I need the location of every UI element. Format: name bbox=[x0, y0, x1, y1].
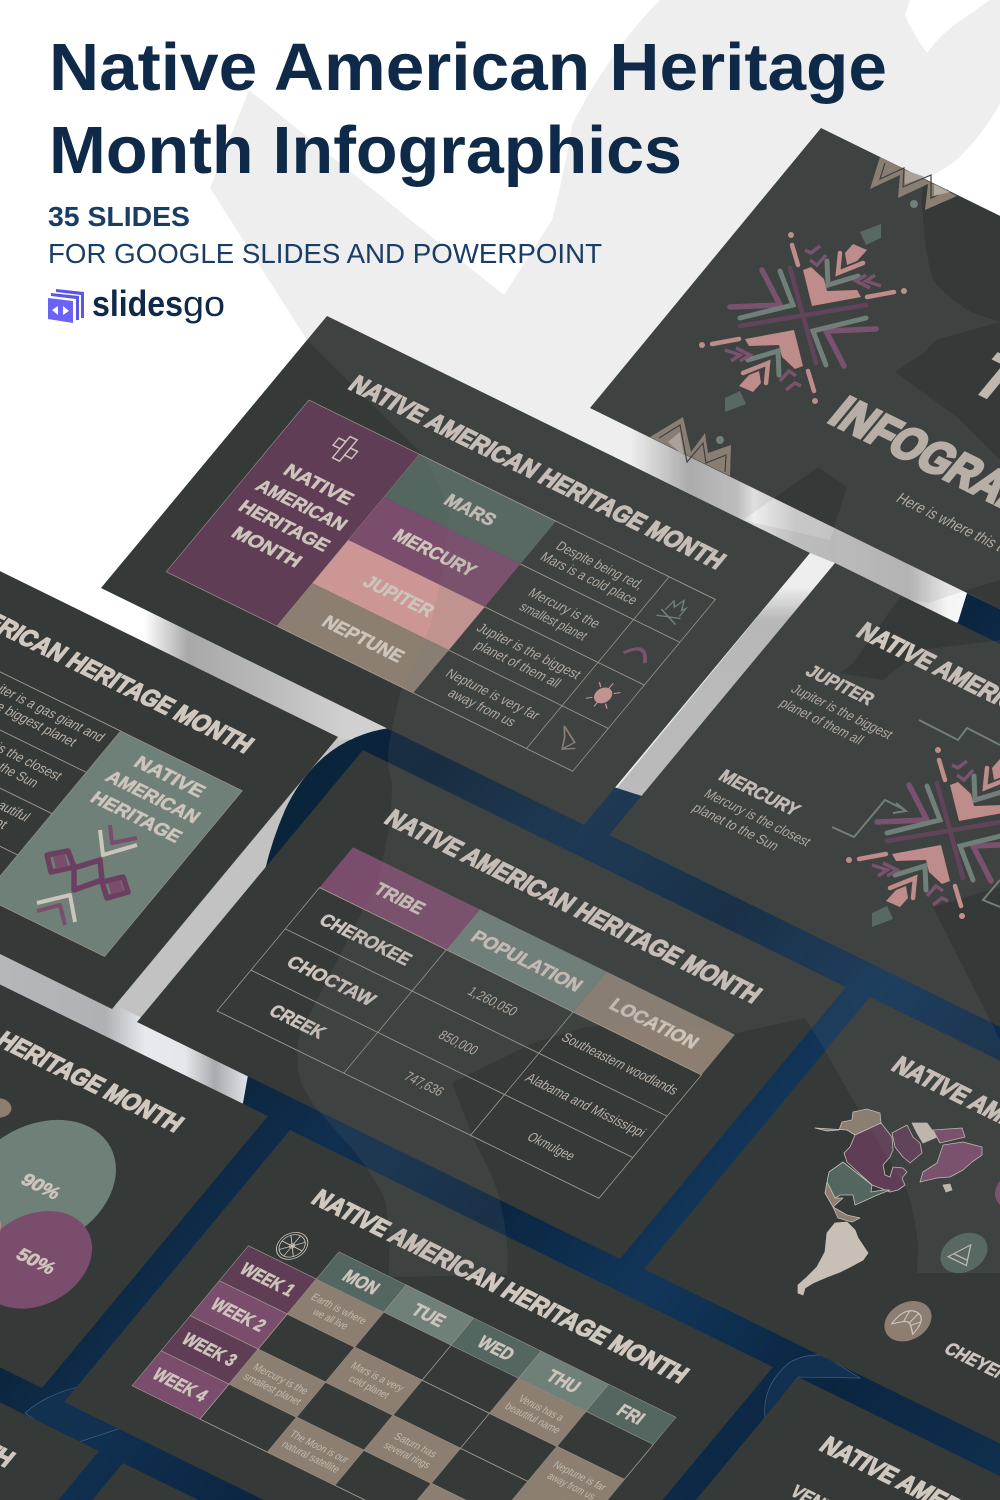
icon: campfire bbox=[656, 595, 692, 625]
left purple panel: MONTH bbox=[227, 523, 306, 571]
icon: tribal diamonds pattern bbox=[37, 825, 137, 925]
left purple panel: NATIVE bbox=[279, 460, 359, 509]
icon: cover bottom mountains bbox=[650, 417, 731, 476]
list grid bbox=[0, 646, 121, 897]
logo: slidesgo: go bbox=[183, 283, 225, 324]
weekday headers: WED bbox=[473, 1332, 519, 1364]
planet descriptions: planet of them all bbox=[472, 638, 564, 690]
calendar cell text: we all live bbox=[309, 1307, 350, 1332]
calendar cell text bbox=[211, 1292, 637, 1500]
icon: cover top mountains bbox=[870, 157, 957, 210]
planet descriptions: Mercury is the bbox=[525, 585, 604, 631]
calendar cell text: natural satellite bbox=[279, 1439, 342, 1476]
row: Neptune: NEPTUNE bbox=[318, 612, 409, 666]
slide title: NATIVE AMERICAN HERITAGE MONTH bbox=[306, 1185, 694, 1389]
calendar cell text: Earth is where bbox=[308, 1292, 369, 1327]
calendar cell text: Venus has a bbox=[515, 1394, 566, 1424]
icon: cover star emblem bbox=[699, 224, 907, 412]
slide: planets table bbox=[101, 316, 810, 825]
green panel bbox=[0, 731, 242, 956]
icon: small blob bbox=[0, 1094, 16, 1121]
calendar cell text: Mercury is the bbox=[250, 1362, 311, 1397]
icon: turtle bbox=[583, 678, 624, 712]
slide: percentage circles bbox=[0, 879, 268, 1388]
planet descriptions: Jupiter is the biggest bbox=[473, 620, 585, 682]
weekday headers: MON bbox=[338, 1266, 384, 1298]
slide: tribe table bbox=[137, 750, 846, 1259]
circle: 90%: 90% bbox=[17, 1169, 66, 1203]
row: Mars: MARS bbox=[440, 490, 501, 530]
text block: Jupiter: planet of them all bbox=[776, 695, 867, 747]
row: Jupiter bbox=[312, 540, 485, 650]
slide title: NATIVE AMERICAN HERITAGE MONTH bbox=[379, 805, 767, 1009]
location values: Southeastern woodlands bbox=[558, 1030, 682, 1098]
calendar cell text: cold planet bbox=[346, 1374, 391, 1401]
weekday headers: TUE bbox=[407, 1300, 450, 1331]
text block: Mercury: MERCURY bbox=[714, 766, 805, 820]
weekday headers bbox=[316, 1252, 676, 1444]
shadow band under planets slide bbox=[100, 587, 400, 740]
slide: weekly calendar bbox=[64, 1130, 773, 1500]
calendar cell text: Mars is a very bbox=[348, 1361, 406, 1395]
page title: Native American Heritage bbox=[49, 30, 887, 105]
row: Mars bbox=[384, 454, 556, 564]
table grid bbox=[217, 888, 701, 1198]
calendar cell text: smallest planet bbox=[240, 1372, 303, 1408]
light arc patches on navy bbox=[25, 1355, 860, 1445]
green panel: NATIVE bbox=[130, 752, 210, 801]
slide: Jupiter and Mercury bbox=[609, 563, 1000, 1072]
tribe names: CHOCTAW bbox=[283, 952, 381, 1010]
week labels: WEEK 4 bbox=[148, 1364, 212, 1405]
table header: location bbox=[573, 972, 735, 1075]
icon: arc bbox=[624, 644, 652, 663]
shadow band between planets slide and Jupiter slide bbox=[617, 553, 835, 796]
navy background blob bbox=[0, 593, 1000, 1500]
table header: tribe bbox=[320, 847, 480, 950]
page title: Month Infographics bbox=[49, 113, 682, 188]
logo: slidesgo: slides bbox=[92, 283, 183, 324]
green panel: HERITAGE bbox=[86, 787, 187, 846]
circle: 50%: 50% bbox=[12, 1244, 61, 1278]
slide: Venus bbox=[572, 1377, 1000, 1500]
location values: Alabama and Mississippi bbox=[522, 1070, 649, 1140]
population values: 850,000 bbox=[435, 1028, 482, 1058]
calendar cell text: several rings bbox=[381, 1440, 433, 1471]
location values: Okmulgee bbox=[524, 1129, 579, 1163]
table header: tribe: TRIBE bbox=[370, 879, 430, 918]
calendar cell text: Neptune is far bbox=[550, 1460, 608, 1494]
arrow: Mercury bbox=[832, 800, 906, 837]
slide title: NATIVE AMERICAN HERITAGE MONTH bbox=[343, 371, 731, 575]
text block: Jupiter: JUPITER bbox=[802, 661, 879, 709]
text block: Mercury: planet to the Sun bbox=[689, 800, 783, 853]
table header: location: LOCATION bbox=[605, 994, 703, 1052]
icon: wheel bbox=[270, 1228, 314, 1264]
grid of description table bbox=[277, 454, 715, 771]
slide: map bbox=[644, 997, 1000, 1500]
text block: Jupiter bbox=[776, 661, 914, 756]
icon: bird bbox=[550, 726, 585, 753]
calendar cell text: Saturn has bbox=[391, 1431, 439, 1460]
slide: bottom left bbox=[0, 1214, 99, 1500]
grey band between heritage slide and tribe table slide bbox=[110, 730, 370, 1025]
row: Jupiter: JUPITER bbox=[359, 571, 439, 621]
row: Neptune bbox=[277, 583, 449, 693]
green panel: AMERICAN bbox=[101, 766, 205, 827]
left purple panel: AMERICAN bbox=[252, 476, 352, 535]
circle marker: purple bbox=[985, 1162, 1000, 1216]
circle: 50% bbox=[0, 1168, 115, 1325]
shadow band under cover slide bbox=[560, 408, 1000, 660]
page title bbox=[49, 30, 887, 188]
calendar filled cells bbox=[200, 1279, 653, 1500]
population values: 747,636 bbox=[401, 1069, 447, 1099]
left purple panel: HERITAGE bbox=[234, 496, 335, 555]
calendar cell text: beautiful name bbox=[502, 1401, 563, 1437]
subtitle: 35 SLIDES bbox=[48, 201, 190, 232]
population values: 1,260,050 bbox=[464, 984, 521, 1019]
planet descriptions: smallest planet bbox=[516, 599, 591, 643]
tribe names: CREEK bbox=[265, 1001, 330, 1042]
slide: bottom centre bbox=[0, 1463, 606, 1500]
weekday headers: THU bbox=[542, 1366, 585, 1397]
logo: slidesgo bbox=[48, 283, 225, 324]
circle marker: brown with shell icon bbox=[875, 1294, 941, 1348]
list descriptions bbox=[0, 673, 108, 840]
week labels: WEEK 3 bbox=[178, 1329, 242, 1370]
row: Mercury bbox=[348, 497, 520, 607]
slide: heritage panel bbox=[0, 500, 338, 1009]
icon: star emblem on Jupiter slide bbox=[846, 739, 1000, 927]
tribe names: CHEROKEE bbox=[315, 910, 417, 969]
weekday headers: FRI bbox=[612, 1400, 649, 1428]
planet descriptions bbox=[427, 534, 656, 738]
calendar grid bbox=[200, 1279, 653, 1500]
planet descriptions: Despite being red, bbox=[553, 538, 647, 592]
week labels: WEEK 1 bbox=[236, 1259, 300, 1300]
circle marker: green with mountain icon bbox=[931, 1226, 997, 1280]
planet descriptions: Mars is a cold place bbox=[537, 549, 641, 608]
subtitle bbox=[48, 201, 602, 269]
text block: Mercury bbox=[689, 766, 832, 863]
arrow: lower right bbox=[983, 880, 1000, 907]
planet descriptions: Neptune is very far bbox=[442, 666, 544, 723]
row: Mercury: MERCURY bbox=[389, 525, 481, 580]
arrow: Jupiter bbox=[919, 720, 1000, 745]
map of the Americas bbox=[798, 1109, 982, 1295]
tribe names bbox=[247, 910, 417, 1051]
table header: population: POPULATION bbox=[467, 927, 587, 995]
text block: Mercury: Mercury is the closest bbox=[701, 786, 815, 849]
week labels: WEEK 2 bbox=[206, 1294, 271, 1335]
circle: 90% bbox=[0, 1098, 147, 1272]
large translucent watermark shape bbox=[210, 0, 1000, 1277]
population values bbox=[396, 984, 521, 1101]
table header: population bbox=[446, 909, 607, 1012]
planet descriptions: away from us bbox=[445, 685, 520, 729]
week labels bbox=[132, 1246, 316, 1419]
location values bbox=[488, 1029, 684, 1181]
shadow band under heritage slide bbox=[0, 950, 250, 1108]
slide: cover bbox=[590, 128, 1000, 645]
icon: totem bbox=[325, 433, 364, 465]
calendar cell text: The Moon is our bbox=[287, 1429, 351, 1466]
left purple panel bbox=[166, 400, 420, 626]
subtitle: FOR GOOGLE SLIDES AND POWERPOINT bbox=[48, 238, 602, 269]
text block: Jupiter: Jupiter is the biggest bbox=[788, 681, 897, 742]
